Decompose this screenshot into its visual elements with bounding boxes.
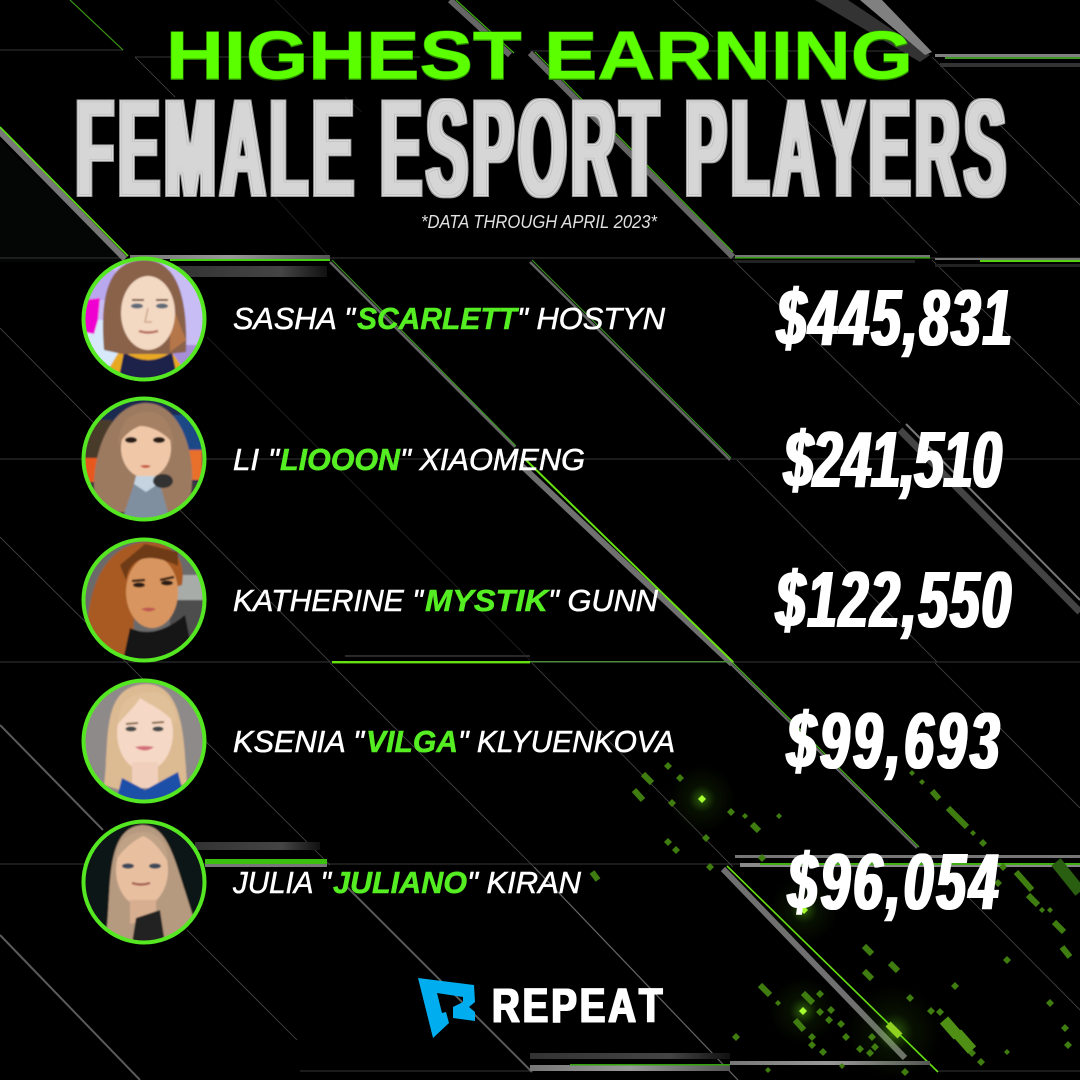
portrait: Liooon [82, 396, 206, 522]
name: Scarlett: " HOSTYN [517, 301, 666, 336]
name: Mystik: KATHERINE " [233, 583, 425, 618]
portrait: Scarlett [80, 255, 210, 385]
earnings: Scarlett: $445,831 [776, 274, 1012, 363]
earnings: Vilga: $99,693 [786, 697, 1000, 786]
name: Vilga: VILGA [366, 724, 458, 759]
name: Juliano: JULIANO [333, 865, 467, 900]
wordmark: REPEAT [492, 980, 663, 1033]
portrait: Juliano [80, 818, 210, 948]
name: Vilga: KSENIA " [233, 724, 366, 759]
green particles [592, 762, 1080, 1080]
name: Vilga: " KLYUENKOVA [458, 724, 675, 759]
name: Scarlett: SASHA " [233, 301, 357, 336]
name: Juliano: JULIA " [232, 865, 333, 900]
title: female esport players: FEMALE ESPORT PLAYERS [76, 70, 1005, 226]
row 2: Liooon [80, 396, 1002, 526]
row 1: Scarlett [80, 255, 1012, 385]
title: highest earning: HIGHEST EARNING [166, 18, 913, 94]
icon: Repeat mark [418, 978, 475, 1038]
row 5: Juliano [80, 818, 999, 948]
earnings: Liooon: $241,510 [783, 416, 1002, 505]
name: Liooon: LI " [233, 442, 281, 477]
data note: *DATA THROUGH APRIL 2023* [421, 212, 658, 232]
earnings: Mystik: $122,550 [775, 556, 1011, 645]
portrait: Mystik [80, 536, 210, 666]
name: Mystik: MYSTIK [425, 583, 551, 618]
row 3: Mystik [80, 536, 1011, 666]
name: Mystik: " GUNN [548, 583, 659, 618]
name: Juliano: " KIRAN [467, 865, 582, 900]
earnings: Juliano: $96,054 [787, 838, 999, 927]
portrait: Vilga [80, 677, 210, 807]
row 4: Vilga [80, 677, 1000, 807]
name: Liooon: " XIAOMENG [400, 442, 585, 477]
name: Liooon: LIOOON [280, 442, 401, 477]
name: Scarlett: SCARLETT [357, 301, 520, 336]
logo: Repeat [418, 978, 663, 1038]
